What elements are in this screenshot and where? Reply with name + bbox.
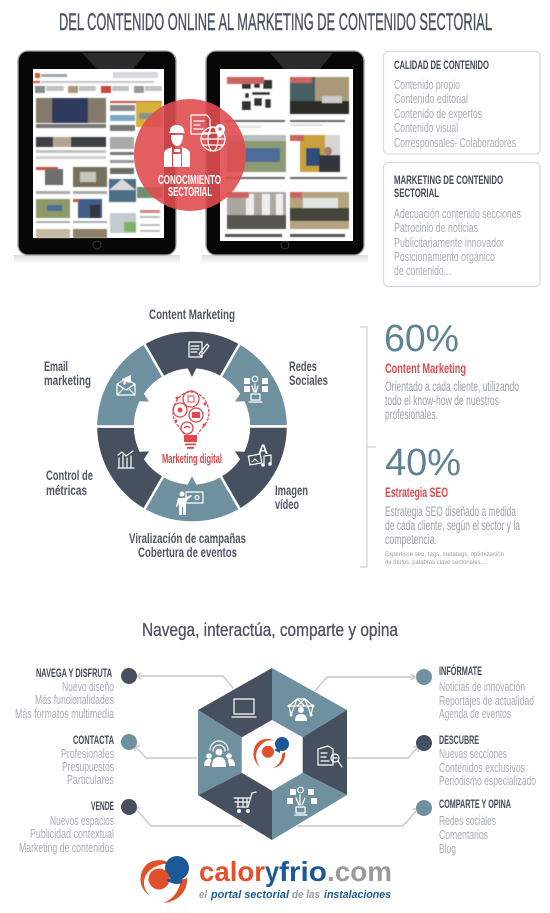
icon: media (248, 441, 272, 467)
list: contacta: Particulares (67, 772, 114, 787)
label: imagen video: vídeo (275, 496, 299, 512)
list: comparte y opina: Comentarios (439, 827, 488, 842)
stat: 60% content marketing: Content Marketing (385, 361, 466, 376)
logo: caloryfrio.com: el (199, 889, 208, 901)
panel: calidad de contenido: Contenido visual (394, 120, 458, 135)
stat: 40% estrategia seo (385, 442, 520, 566)
list: vende (19, 799, 114, 855)
icon: laptop (232, 699, 256, 717)
list: descubre: DESCUBRE (439, 733, 479, 747)
dot: navega (121, 668, 137, 684)
label: imagen video: Imagen (275, 482, 308, 498)
dot: descubre (416, 735, 432, 751)
list: navega y disfruta: Más funcionalidades (35, 692, 114, 707)
list: vende: Marketing de contenidos (19, 840, 114, 855)
icon: media: A (258, 441, 268, 457)
list: vende: Publicidad contextual (30, 826, 114, 841)
chart: hexagon (198, 668, 347, 840)
label: viralizacion (129, 530, 246, 560)
label: redes sociales (289, 358, 328, 388)
list: descubre (439, 733, 536, 788)
stat: 40% estrategia seo: Estrategia SEO (385, 485, 448, 500)
logo: caloryfrio.com: y (265, 856, 279, 887)
label: imagen video (275, 482, 308, 512)
list: comparte y opina: Redes sociales (439, 813, 496, 828)
tablet: right (202, 51, 368, 264)
heading: navega: Navega, interactúa, comparte y opina (142, 620, 399, 640)
list: contacta: CONTACTA (73, 733, 114, 747)
stat: 60% content marketing: profesionales. (385, 407, 438, 422)
chart: marketing digital wheel (85, 330, 299, 523)
stat: 40% estrategia seo: Expertisse seo, tags, metatags, optimización (385, 551, 504, 558)
label: content marketing: Content Marketing (149, 306, 235, 322)
icon: social (287, 787, 317, 815)
label: viralizacion: Cobertura de eventos (138, 544, 237, 560)
panel: marketing de contenido sectorial: SECTORIAL (394, 186, 439, 200)
panel: calidad de contenido (384, 52, 540, 154)
list: informate: INFÓRMATE (439, 663, 482, 678)
icon: light bulb (173, 391, 209, 449)
list: vende: VENDE (91, 799, 114, 813)
dot: informate (416, 669, 432, 685)
panel: marketing de contenido sectorial (384, 162, 540, 286)
icon: email and megaphone (117, 375, 135, 395)
dot: comparte (416, 800, 432, 816)
badge: conocimiento sectorial (134, 99, 246, 211)
list: contacta: Presupuestos (62, 759, 114, 774)
badge: conocimiento sectorial: CONOCIMIENTO (158, 172, 221, 187)
dot: contacta (121, 734, 137, 750)
icon: cart (234, 792, 256, 813)
list: contacta: Profesionales (61, 746, 114, 761)
logo: caloryfrio.com: calor (199, 856, 265, 887)
tablet: left (14, 51, 180, 264)
label: email marketing (44, 358, 91, 388)
list: comparte y opina (439, 797, 511, 856)
logo: caloryfrio.com (140, 856, 392, 903)
label: email marketing: Email (44, 358, 68, 374)
icon: people (204, 741, 235, 767)
icon: logo mark (140, 856, 189, 903)
icon: presenter (176, 492, 203, 515)
label: control de metricas: métricas (46, 482, 87, 498)
label: control de metricas: Control de (46, 467, 93, 483)
list: comparte y opina: Blog (439, 841, 456, 856)
stat: 40% estrategia seo: de títulos, palabras clave sectoriales,... (385, 559, 487, 566)
panel: calidad de contenido: CALIDAD DE CONTENIDO (394, 58, 489, 72)
icon: network (288, 699, 314, 721)
icon: worker (164, 125, 190, 167)
stat: 60% content marketing (384, 318, 519, 422)
label: redes sociales: Redes (289, 358, 317, 374)
icon: document (191, 115, 210, 134)
panel: calidad de contenido: Contenido editorial (394, 91, 468, 106)
bracket (360, 327, 376, 567)
label: redes sociales: Sociales (289, 372, 328, 388)
list: vende: Nuevos espacios (50, 813, 114, 828)
chart: marketing digital wheel: Marketing digital (162, 452, 222, 466)
list: contacta (61, 733, 114, 787)
stat: 40% estrategia seo: 40% (385, 442, 461, 484)
list: navega y disfruta: NAVEGA Y DISFRUTA (36, 666, 112, 680)
icon: bar chart (118, 451, 134, 468)
label: viralizacion: Viralización de campañas (129, 530, 246, 546)
list: navega y disfruta (15, 666, 115, 721)
list: informate (439, 663, 534, 721)
stat: 40% estrategia seo: competencia. (385, 532, 437, 547)
panel: marketing de contenido sectorial: Publicitariamente innovador (394, 235, 504, 250)
label: control de metricas (46, 467, 93, 498)
dot: vende (121, 799, 137, 815)
list: navega y disfruta: Más formatos multimedia (15, 706, 115, 721)
icon: document search (318, 746, 342, 767)
panel: calidad de contenido: Contenido de expertos (394, 106, 482, 121)
icon: social network (244, 376, 268, 402)
label: email marketing: marketing (44, 372, 91, 388)
panel: marketing de contenido sectorial: Patrocinio de noticias (394, 220, 478, 235)
logo: caloryfrio.com: instalaciones (324, 889, 391, 901)
list: informate: Agenda de eventos (439, 706, 511, 721)
stat: 60% content marketing: 60% (384, 318, 459, 360)
logo: caloryfrio.com: portal sectorial (210, 889, 290, 901)
logo: caloryfrio.com: .com (327, 856, 392, 887)
connectors (135, 673, 418, 826)
logo: caloryfrio.com: frio (279, 856, 327, 887)
list: descubre: Nuevas secciones (439, 746, 507, 761)
icon: notepad (189, 342, 209, 357)
panel: marketing de contenido sectorial: de contenido... (394, 263, 451, 278)
list: navega y disfruta: Nuevo diseño (62, 679, 114, 694)
logo: caloryfrio.com: de las (292, 889, 320, 901)
panel: calidad de contenido: Contenido propio (394, 77, 460, 92)
badge: conocimiento sectorial: SECTORIAL (168, 184, 212, 199)
icon: small logo (253, 737, 289, 768)
icon: globe and pin (201, 124, 225, 151)
panel: marketing de contenido sectorial: Posicionamiento orgánico (394, 249, 495, 264)
